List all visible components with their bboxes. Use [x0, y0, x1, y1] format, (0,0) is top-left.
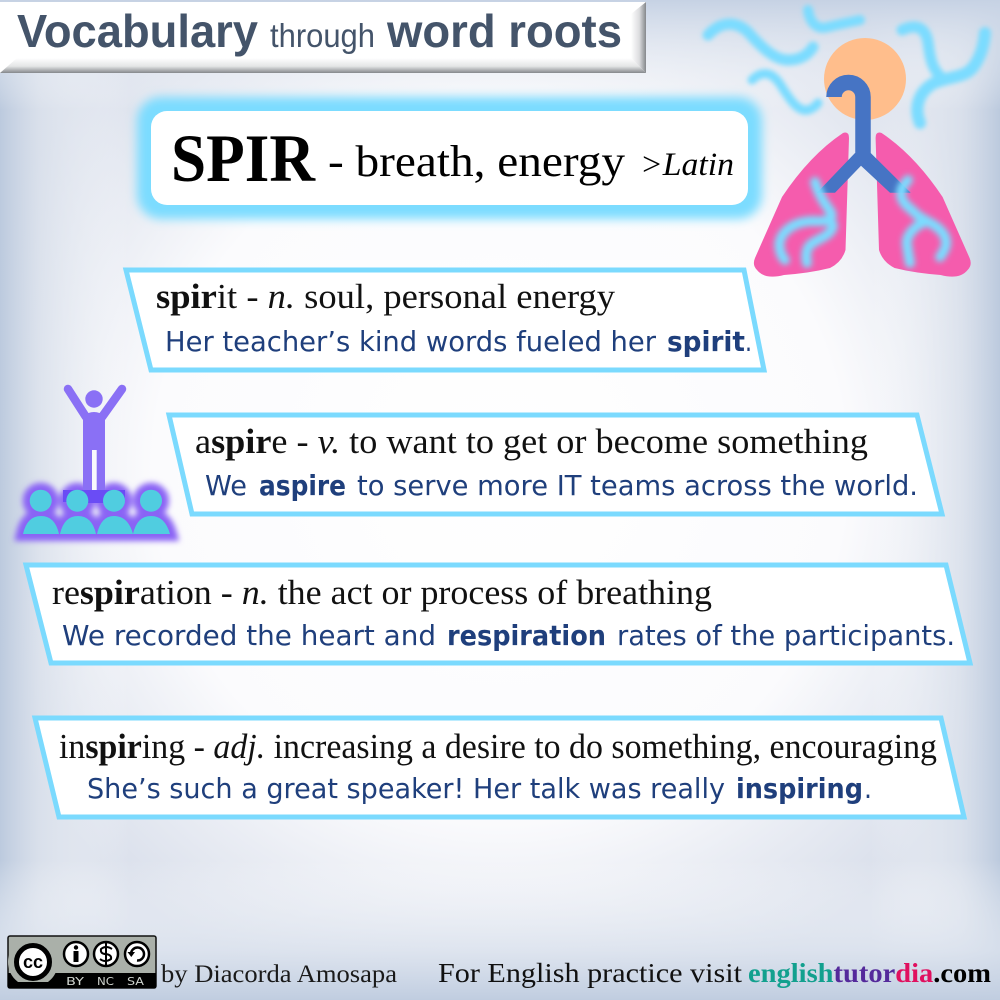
right lung: [876, 133, 971, 277]
audience glow: [23, 490, 170, 534]
icon: creative commons licence badge: BY: [66, 975, 84, 988]
heading text: >Latin: [640, 147, 734, 183]
icon: creative commons licence badge: NC: [97, 975, 114, 988]
heading box: [137, 97, 762, 219]
panel: aspire: [169, 415, 942, 514]
example: aspire: We: [205, 469, 247, 502]
author credit: by Diacorda Amosapa: [161, 961, 397, 988]
example: spirit: .: [745, 325, 752, 358]
example: spirit: spirit: [667, 325, 745, 358]
left lung: [754, 133, 849, 277]
icon: creative commons licence badge: cc: [23, 952, 43, 972]
panel: spirit: [126, 270, 764, 370]
example: inspiring: .: [864, 772, 872, 805]
icon: lungs with breath wisps: [708, 10, 985, 277]
website link: englishtutordia.com: [748, 958, 992, 988]
air wisps: [708, 10, 985, 123]
panel: respiration: [26, 565, 970, 663]
heading text: SPIR: [171, 120, 316, 196]
example: inspiring: inspiring: [736, 772, 863, 805]
example: respiration: rates of the participants.: [617, 619, 955, 652]
title text: Vocabulary: [17, 5, 258, 57]
icon: creative commons licence badge: [8, 936, 156, 988]
breath inside lungs: [779, 180, 946, 263]
example: aspire: to serve more IT teams across the world.: [357, 469, 918, 502]
example: respiration: We recorded the heart and: [62, 619, 436, 652]
icon: person with raised arms above audience: [23, 389, 170, 534]
example: spirit: Her teacher’s kind words fueled her: [165, 325, 656, 358]
definition: respiration: respiration - n. the act or process of breathing: [52, 573, 712, 612]
windpipe: [817, 82, 911, 193]
head circle: [824, 38, 906, 120]
example: aspire: aspire: [259, 469, 346, 502]
footer call to action: For English practice visit: [438, 958, 743, 988]
definition: aspire: aspire - v. to want to get or become something: [195, 422, 868, 461]
definition: inspiring: inspiring - adj. increasing a desire to do something, encouraging: [59, 727, 937, 766]
definition: spirit: spirit - n. soul, personal energy: [156, 277, 616, 316]
title text: word roots: [386, 5, 622, 57]
title text: through: [270, 17, 375, 54]
panel: inspiring: [35, 718, 964, 817]
example: inspiring: She’s such a great speaker! Her talk was really: [87, 772, 725, 805]
example: respiration: respiration: [447, 619, 606, 652]
heading glow: [137, 97, 762, 219]
title banner: [0, 2, 646, 73]
icon: creative commons licence badge: SA: [127, 975, 145, 988]
audience: [23, 490, 170, 534]
heading text: - breath, energy: [328, 137, 625, 186]
standing person: [63, 389, 125, 503]
